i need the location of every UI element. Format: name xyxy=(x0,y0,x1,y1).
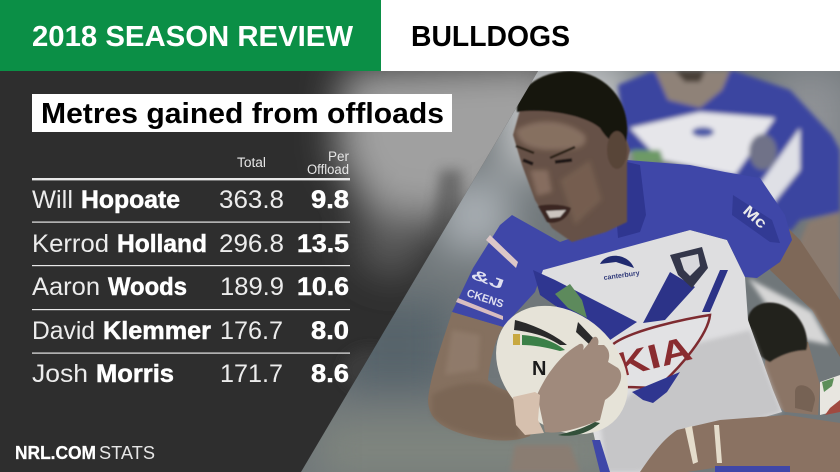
chart title: Metres gained from offloads xyxy=(41,98,444,130)
Bulldogs crest xyxy=(670,247,708,288)
head xyxy=(513,71,630,242)
hand on ball xyxy=(537,337,621,433)
header bar: team name xyxy=(381,0,840,71)
row: Aaron Woods: Aaron xyxy=(32,273,100,301)
row: Josh Morris: Josh xyxy=(32,360,88,388)
sleeve trim xyxy=(486,235,518,268)
row: Will Hopoate: Will xyxy=(32,186,73,214)
row: Kerrod Holland: 13.5 xyxy=(297,230,349,258)
row: Kerrod Holland xyxy=(32,230,349,258)
row: Josh Morris: 171.7 xyxy=(220,360,283,388)
photo: Bulldogs player carrying the ball: Mc xyxy=(739,202,770,232)
footer logo: NRL.COM STATS: STATS xyxy=(99,443,155,463)
column heading: per offload: Offload xyxy=(307,162,349,177)
Kia sponsor badge: KIA xyxy=(613,330,696,385)
table rules xyxy=(32,178,350,354)
canterbury logo xyxy=(600,256,634,268)
row: Kerrod Holland: Holland xyxy=(117,230,207,258)
row: Will Hopoate: 9.8 xyxy=(311,186,349,214)
footer logo: NRL.COM STATS: NRL.COM xyxy=(15,443,96,463)
player's right arm behind xyxy=(770,215,840,357)
header bar: season review: 2018 SEASON REVIEW xyxy=(32,21,354,53)
dark stats panel xyxy=(0,60,560,472)
row: Kerrod Holland: Kerrod xyxy=(32,230,109,258)
row: Aaron Woods xyxy=(32,273,349,301)
jersey blue top and sleeves xyxy=(452,160,792,327)
row: Kerrod Holland: 296.8 xyxy=(219,230,284,258)
photo: Bulldogs player carrying the ball: &J xyxy=(469,266,506,292)
header bar: season review xyxy=(0,0,381,71)
row: David Klemmer: Klemmer xyxy=(103,317,211,345)
row: Josh Morris: 8.6 xyxy=(311,360,349,388)
jersey torso white xyxy=(535,230,782,472)
photo: Bulldogs player carrying the ball: canterbury xyxy=(603,270,640,282)
player's left arm xyxy=(428,312,530,440)
row: Josh Morris xyxy=(32,360,349,388)
row: Will Hopoate: Hopoate xyxy=(81,186,180,214)
NRL patch xyxy=(555,284,587,318)
row: Will Hopoate xyxy=(32,186,349,214)
row: David Klemmer xyxy=(32,317,349,345)
Kia sponsor badge xyxy=(612,315,710,403)
column heading: total: Total xyxy=(237,155,266,170)
row: David Klemmer: David xyxy=(32,317,95,345)
photo: Bulldogs player carrying the ball xyxy=(301,71,840,472)
background player xyxy=(618,71,840,300)
row: David Klemmer: 176.7 xyxy=(220,317,283,345)
footer logo: NRL.COM STATS xyxy=(15,443,155,463)
shoulder patch text xyxy=(732,195,780,243)
row: Josh Morris: Morris xyxy=(96,360,174,388)
row: Will Hopoate: 363.8 xyxy=(219,186,284,214)
header bar: team name: BULLDOGS xyxy=(411,21,570,53)
column heading: per offload xyxy=(307,149,349,177)
tackler xyxy=(748,302,840,415)
rugby league ball: N xyxy=(532,358,546,380)
photo: Bulldogs player carrying the ball: CKENS xyxy=(465,287,505,311)
row: David Klemmer: 8.0 xyxy=(311,317,349,345)
rugby league ball xyxy=(496,306,628,436)
row: Aaron Woods: 10.6 xyxy=(297,273,349,301)
row: Aaron Woods: 189.9 xyxy=(220,273,284,301)
column heading: per offload: Per xyxy=(328,149,349,164)
stats table xyxy=(32,149,350,388)
wrist tape xyxy=(513,392,544,435)
tackler arm xyxy=(640,415,840,472)
row: Aaron Woods: Woods xyxy=(108,273,187,301)
blue sash stripes on jersey xyxy=(533,270,637,342)
